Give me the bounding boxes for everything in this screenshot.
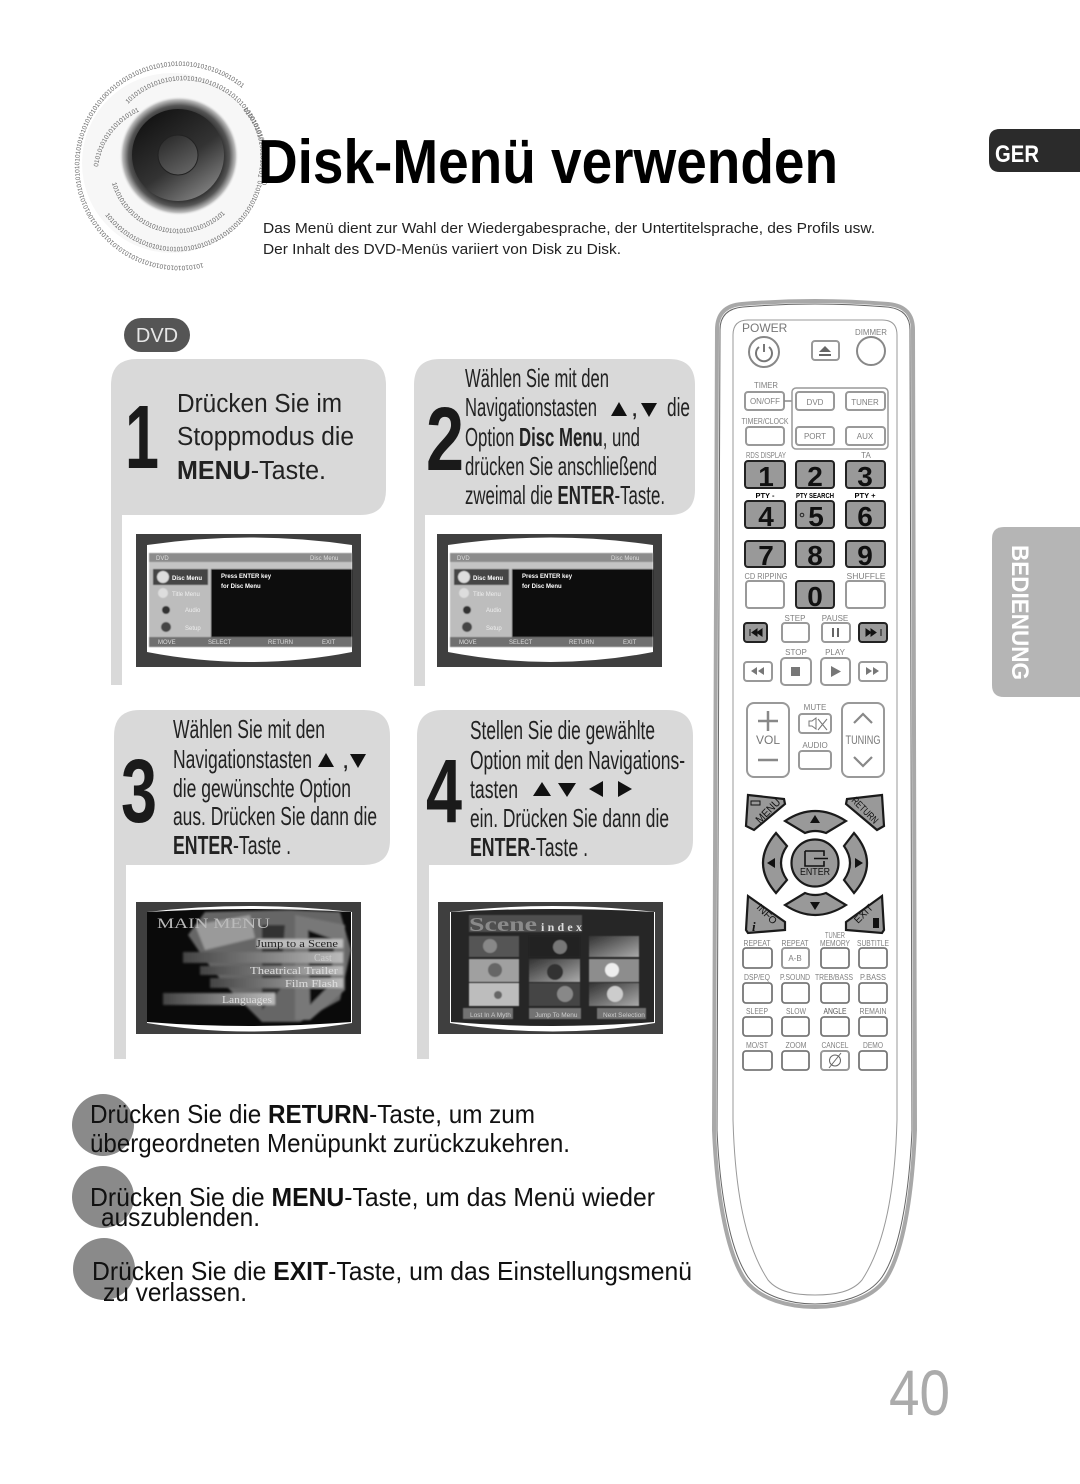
function buttons: P.BASS xyxy=(860,973,886,982)
panel: step 1: MENU-Taste. xyxy=(177,457,326,485)
transport buttons: PLAY xyxy=(825,648,846,657)
number keys: RDS DISPLAY xyxy=(746,451,787,460)
number keys: 3 xyxy=(857,461,873,492)
panel: step 4: ENTER-Taste . xyxy=(470,832,588,862)
function buttons: MO/ST xyxy=(746,1041,768,1050)
icon: speaker with binary rings: 1010101010101010101010101010101010101010101010101010101010101010101001010101010101010101010101010101010 xyxy=(105,180,262,252)
screenshot: step 3 main menu: Jump to a Scene xyxy=(256,939,339,950)
screenshot: step 3 main menu: Theatrical Trailer xyxy=(250,966,339,977)
screenshot: step 1 disc menu: Disc Menu xyxy=(172,576,202,582)
panel: step 2: , xyxy=(631,392,638,422)
screenshot: step 1 disc menu: Title Menu xyxy=(172,592,200,598)
function buttons xyxy=(743,931,889,1070)
function buttons: REPEAT xyxy=(744,939,771,948)
number keys: 8 xyxy=(807,540,823,571)
screenshot: step 3 main menu: Languages xyxy=(222,995,272,1006)
screenshot: step 1 disc menu: for Disc Menu xyxy=(221,584,261,590)
number keys: PTY SEARCH xyxy=(796,491,834,500)
panel: step 2: Option Disc Menu, und xyxy=(465,422,640,452)
volume and tuning: MUTE xyxy=(804,703,826,712)
panel: step 1 xyxy=(111,359,386,685)
screenshot: step 2 disc menu: Title Menu xyxy=(473,592,501,598)
panel: step 1: 1 xyxy=(125,388,159,488)
panel: step 3: 3 xyxy=(121,742,157,842)
number keys: TA xyxy=(861,451,871,460)
number keys: SHUFFLE xyxy=(846,572,886,581)
power section xyxy=(742,321,887,367)
panel: step 3: aus. Drücken Sie dann die xyxy=(173,801,377,831)
function buttons: TUNER xyxy=(825,931,845,940)
source buttons: TIMER xyxy=(754,381,778,390)
function buttons: CANCEL xyxy=(822,1041,849,1050)
screenshot: step 1 disc menu: MOVE xyxy=(158,640,176,646)
navigation keys: ENTER xyxy=(800,867,830,878)
note: menu key: Drücken Sie die MENU-Taste, um das Menü wieder xyxy=(90,1182,655,1212)
power section: POWER xyxy=(742,321,788,335)
panel: step 4: ein. Drücken Sie dann die xyxy=(470,803,669,833)
navigation keys: EXIT xyxy=(852,903,876,926)
icon: speaker with binary rings: 101010101010101010101010101010101010101010101010101010101010 xyxy=(112,182,225,234)
screenshot: step 4 scene index: index xyxy=(541,920,582,934)
source buttons: AUX xyxy=(857,432,874,441)
note: return key: übergeordneten Menüpunkt zurückzukehren. xyxy=(90,1128,570,1158)
panel: step 1: Stoppmodus die xyxy=(177,423,354,451)
screenshot: step 3 main menu: MAIN MENU xyxy=(157,916,270,932)
screenshot: step 4 scene index xyxy=(438,902,663,1034)
number keys: 0 xyxy=(807,581,823,612)
panel: step 2: Wählen Sie mit den xyxy=(465,363,609,393)
screenshot: step 3 main menu xyxy=(136,902,361,1034)
function buttons: SLOW xyxy=(786,1007,806,1016)
panel: step 3: , xyxy=(342,744,349,774)
number keys: 9 xyxy=(857,540,873,571)
volume and tuning: TUNING xyxy=(846,733,880,747)
screenshot: step 1 disc menu: RETURN xyxy=(268,640,293,646)
number keys: 5 xyxy=(808,501,824,532)
page number: 40 xyxy=(889,1357,950,1429)
function buttons: SLEEP xyxy=(746,1007,768,1016)
panel: step 3: Wählen Sie mit den xyxy=(173,714,325,744)
function buttons: REPEAT xyxy=(782,939,809,948)
screenshot: step 3 main menu: Film Flash xyxy=(285,979,338,990)
volume and tuning: AUDIO xyxy=(802,741,828,750)
function buttons: DEMO xyxy=(863,1041,883,1050)
screenshot: step 1 disc menu: Setup xyxy=(185,626,201,632)
intro text xyxy=(263,221,875,258)
function buttons: ZOOM xyxy=(786,1041,807,1050)
screenshot: step 2 disc menu: SELECT xyxy=(509,640,533,646)
panel: step 3: ENTER-Taste . xyxy=(173,830,291,860)
panel: step 3: Navigationstasten xyxy=(173,744,312,774)
panel: step 1: Drücken Sie im xyxy=(177,390,342,418)
badge: DVD: DVD xyxy=(136,325,178,347)
note: exit key xyxy=(73,1238,692,1307)
number keys: 4 xyxy=(758,501,774,532)
number keys: PTY + xyxy=(855,491,876,500)
language tab: GER: GER xyxy=(995,141,1039,168)
language tab: GER xyxy=(989,129,1080,172)
source buttons: TUNER xyxy=(851,398,879,407)
navigation keys: INFO xyxy=(754,902,779,927)
function buttons: TREB/BASS xyxy=(815,973,853,982)
panel: step 4: 4 xyxy=(426,742,462,842)
note: return key: Drücken Sie die RETURN-Taste, um zum xyxy=(90,1099,535,1129)
number keys: 2 xyxy=(807,461,823,492)
function buttons: A-B xyxy=(788,954,802,963)
screenshot: step 1 disc menu: EXIT xyxy=(322,640,336,646)
icon: speaker with binary rings xyxy=(74,61,266,270)
note: return key xyxy=(72,1094,570,1158)
note: menu key xyxy=(72,1166,655,1232)
screenshot: step 4 scene index: Next Selection xyxy=(603,1012,645,1019)
screenshot: step 2 disc menu: Audio xyxy=(486,608,502,614)
function buttons: MEMORY xyxy=(820,939,851,948)
transport buttons: STOP xyxy=(785,648,807,657)
power section: DIMMER xyxy=(855,328,887,337)
screenshot: step 3 main menu: Cast xyxy=(314,953,332,964)
transport buttons: PAUSE xyxy=(822,614,848,623)
source buttons xyxy=(742,381,888,449)
panel: step 2: Navigationstasten xyxy=(465,392,597,422)
number keys: 1 xyxy=(758,461,774,492)
function buttons: SUBTITLE xyxy=(857,939,889,948)
screenshot: step 1 disc menu xyxy=(136,534,361,667)
volume and tuning xyxy=(747,703,884,777)
panel: step 2: 2 xyxy=(426,390,464,490)
number keys: 6 xyxy=(857,501,873,532)
remote control xyxy=(714,301,915,1307)
badge: DVD xyxy=(124,318,190,352)
panel: step 4 xyxy=(417,710,693,1059)
function buttons: DSP/EQ xyxy=(744,973,770,982)
navigation keys xyxy=(746,795,884,934)
screenshot: step 2 disc menu: Press ENTER key xyxy=(522,574,573,580)
screenshot: step 1 disc menu: SELECT xyxy=(208,640,232,646)
note: exit key: Drücken Sie die EXIT-Taste, um das Einstellungsmenü xyxy=(92,1256,692,1286)
transport buttons xyxy=(744,614,887,685)
section tab: BEDIENUNG: BEDIENUNG xyxy=(1006,545,1033,680)
panel: step 4: Option mit den Navigations- xyxy=(470,745,685,775)
navigation keys: RETURN xyxy=(849,795,880,826)
panel: step 2 xyxy=(414,359,695,686)
panel: step 4: tasten xyxy=(470,774,518,804)
note: menu key: auszublenden. xyxy=(101,1202,260,1232)
section tab: BEDIENUNG xyxy=(992,527,1080,697)
number keys: 7 xyxy=(758,540,774,571)
screenshot: step 2 disc menu: RETURN xyxy=(569,640,594,646)
screenshot: step 1 disc menu: Audio xyxy=(185,608,201,614)
note: exit key: zu verlassen. xyxy=(103,1277,247,1307)
transport buttons: STEP xyxy=(785,614,805,623)
panel: step 2: drücken Sie anschließend xyxy=(465,451,657,481)
panel: step 3: die gewünschte Option xyxy=(173,773,351,803)
panel: step 2: zweimal die ENTER-Taste. xyxy=(465,480,665,510)
screenshot: step 2 disc menu: Setup xyxy=(486,626,502,632)
screenshot: step 2 disc menu xyxy=(437,534,662,667)
source buttons: PORT xyxy=(804,432,826,441)
volume and tuning: VOL xyxy=(756,733,780,747)
screenshot: step 2 disc menu: Disc Menu xyxy=(473,576,503,582)
title: Disk-Menü verwenden xyxy=(258,128,838,197)
function buttons: ANGLE xyxy=(824,1007,846,1016)
screenshot: step 4 scene index: Jump To Menu xyxy=(535,1012,578,1019)
navigation keys: i xyxy=(752,919,756,934)
intro text: Der Inhalt des DVD-Menüs variiert von Disk zu Disk. xyxy=(263,242,621,258)
screenshot: step 4 scene index: Lost In A Myth xyxy=(470,1012,511,1019)
panel: step 3 xyxy=(114,710,390,1059)
screenshot: step 4 scene index: Scene xyxy=(469,914,537,936)
screenshot: step 1 disc menu: Disc Menu xyxy=(310,556,338,562)
source buttons: ON/OFF xyxy=(750,397,780,406)
screenshot: step 2 disc menu: DVD xyxy=(457,556,470,562)
screenshot: step 2 disc menu: EXIT xyxy=(623,640,637,646)
intro text: Das Menü dient zur Wahl der Wiedergabesprache, der Untertitelsprache, des Profils usw. xyxy=(263,221,875,237)
screenshot: step 2 disc menu: for Disc Menu xyxy=(522,584,562,590)
number keys: CD RIPPING xyxy=(744,572,788,581)
screenshot: step 1 disc menu: Press ENTER key xyxy=(221,574,272,580)
number keys xyxy=(744,451,886,612)
panel: step 4: Stellen Sie die gewählte xyxy=(470,715,655,745)
function buttons: P.SOUND xyxy=(780,973,810,982)
screenshot: step 2 disc menu: Disc Menu xyxy=(611,556,639,562)
source buttons: DVD xyxy=(807,398,824,407)
icon: speaker with binary rings: 1010101010101010101010101010101010100101010101010101010101010101010101001010101010101010101010101010101010010101010101010101010101010101010101010101010101010101010101010101011 xyxy=(74,61,244,270)
number keys: PTY - xyxy=(755,491,775,500)
screenshot: step 2 disc menu: MOVE xyxy=(459,640,477,646)
source buttons: TIMER/CLOCK xyxy=(742,417,789,426)
remote body xyxy=(714,301,915,1307)
navigation keys: MENU xyxy=(754,796,783,826)
function buttons: REMAIN xyxy=(860,1007,887,1016)
panel: step 2: die xyxy=(667,392,690,422)
screenshot: step 1 disc menu: DVD xyxy=(156,556,169,562)
